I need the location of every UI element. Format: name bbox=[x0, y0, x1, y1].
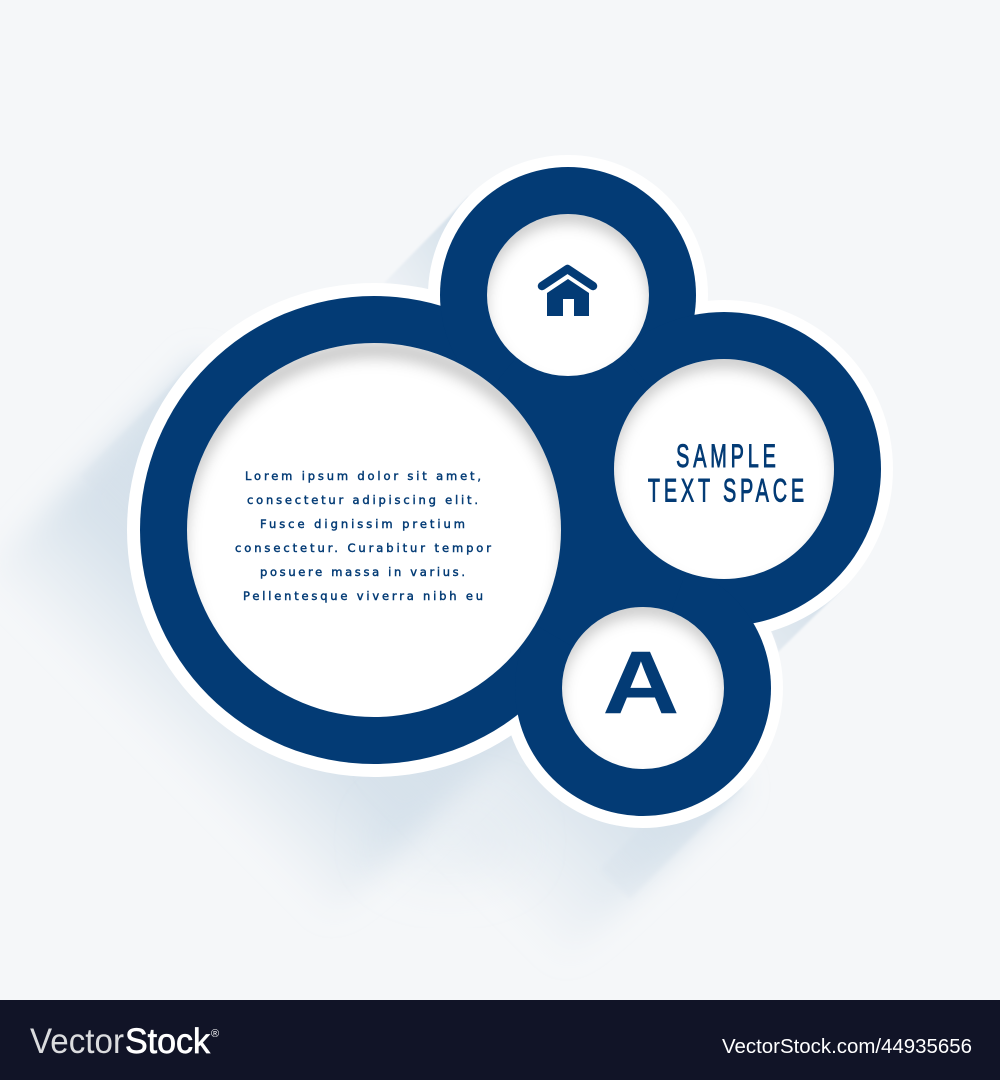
white outer border of the bubbles bbox=[127, 155, 893, 828]
footer logo bbox=[30, 1022, 219, 1061]
blue bubble cluster bbox=[140, 167, 881, 816]
body text: consectetur. Curabitur tempor bbox=[235, 541, 491, 555]
body text: posuere massa in varius. bbox=[260, 565, 465, 579]
heading: sample text space: TEXT SPACE bbox=[648, 473, 804, 509]
body text: consectetur adipiscing elit. bbox=[247, 493, 478, 507]
body text: Lorem ipsum dolor sit amet, bbox=[245, 469, 481, 483]
body text bbox=[235, 469, 491, 603]
panel: right sample text circle bbox=[614, 359, 834, 579]
body text: Pellentesque viverra nibh eu bbox=[243, 589, 483, 603]
panel: bottom letter circle bbox=[562, 607, 724, 769]
panel: top home circle bbox=[487, 214, 649, 376]
footer logo: Stock bbox=[125, 1022, 210, 1061]
long drop shadow bbox=[0, 196, 843, 988]
letter A: A bbox=[602, 632, 680, 732]
heading: sample text space bbox=[648, 438, 804, 509]
footer logo: ® bbox=[211, 1028, 219, 1040]
body text: Fusce dignissim pretium bbox=[260, 517, 465, 531]
icon: house bbox=[542, 269, 593, 316]
footer logo: Vector bbox=[30, 1022, 124, 1061]
footer url: VectorStock.com/44935656 bbox=[722, 1036, 972, 1058]
heading: sample text space: SAMPLE bbox=[676, 438, 776, 474]
panel: large text circle bbox=[187, 343, 561, 717]
footer bar bbox=[0, 1000, 1000, 1080]
